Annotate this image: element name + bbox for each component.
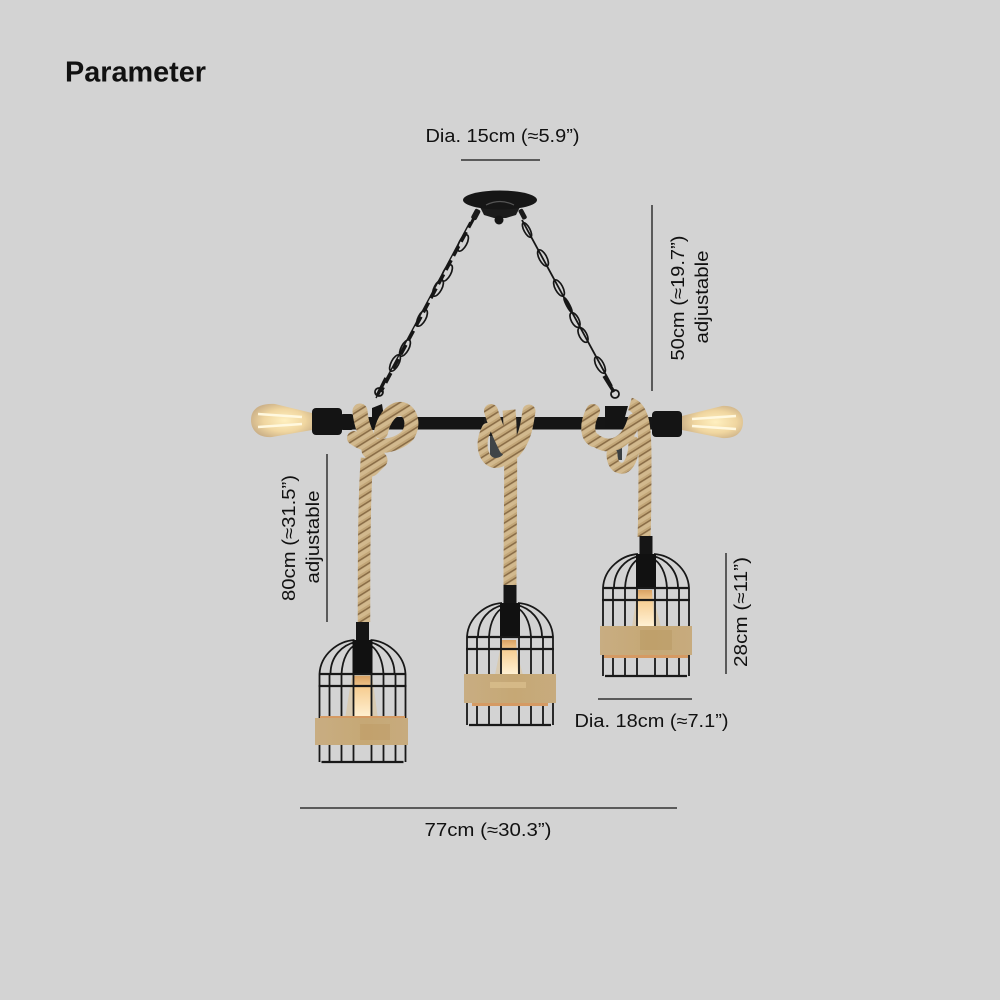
dimension: canopy diameter: Dia. 15cm (≈5.9”) (426, 126, 580, 146)
left cage pendant (315, 622, 408, 762)
rope: middle loop and cord (483, 410, 529, 585)
dimension: rope length: 80cm (≈31.5”) (279, 475, 299, 601)
left chain (375, 218, 474, 398)
illustration: pendant lamp (251, 190, 743, 762)
dimension: cage diameter: Dia. 18cm (≈7.1”) (574, 711, 728, 731)
right chain (521, 220, 619, 398)
right socket (652, 411, 682, 437)
dimension: overall width: 77cm (≈30.3”) (424, 820, 552, 840)
dimension: rope length: adjustable (303, 490, 323, 584)
right cage pendant (600, 536, 692, 676)
left bulb (251, 404, 312, 437)
dimension: chain length: adjustable (692, 250, 712, 344)
left socket (312, 408, 354, 435)
title: Parameter (65, 56, 206, 88)
rope: right loop and cord (588, 404, 645, 537)
rope: left knot and cord (354, 409, 411, 622)
ceiling canopy (463, 190, 537, 224)
dimension: rope length (279, 454, 328, 622)
dimension: cage height: 28cm (≈11”) (731, 557, 751, 667)
right bulb (682, 406, 743, 438)
dimension: chain length (651, 205, 712, 391)
dimension: cage height (725, 553, 751, 674)
horizontal pipe (340, 404, 662, 460)
dimension: chain length: 50cm (≈19.7”) (668, 236, 688, 360)
middle cage pendant (464, 585, 556, 725)
